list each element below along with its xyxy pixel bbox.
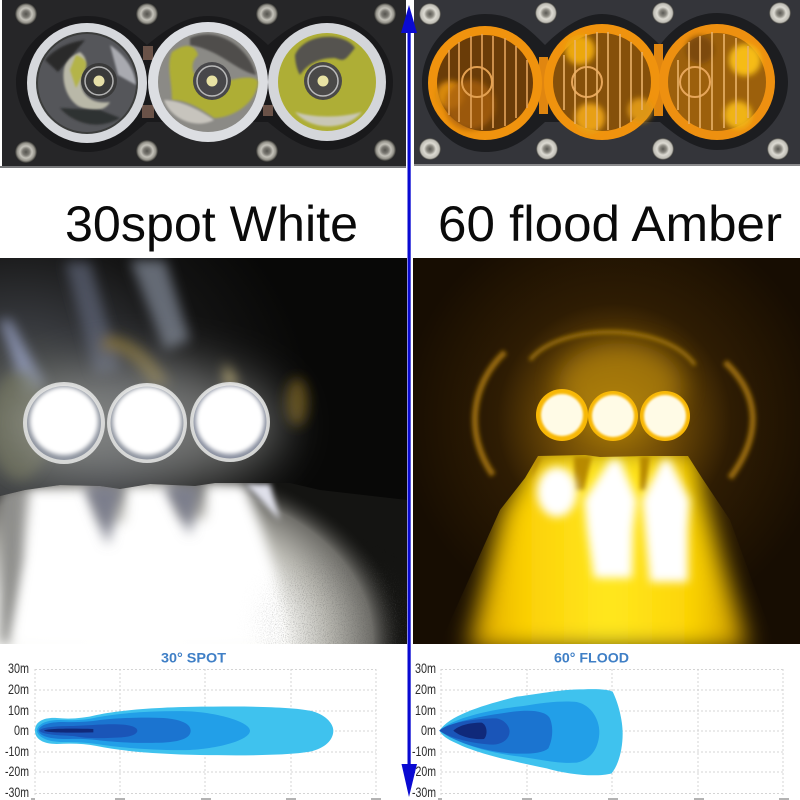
y axis labels: 0m: [421, 722, 436, 738]
amber lens bridges: [539, 44, 663, 116]
mounting bolts: [15, 3, 396, 163]
heading: 30spot White: 30spot White: [65, 196, 358, 252]
panel: white beam photo: [0, 258, 407, 650]
lens 1 reflector: [36, 32, 138, 134]
y axis labels: 30m: [8, 660, 29, 676]
amber housing recess: [422, 13, 788, 152]
amber beam on ground: [468, 450, 748, 650]
white beam on ground: [0, 480, 407, 650]
lens 2 reflector: [158, 32, 258, 132]
y axis labels: 20m: [8, 681, 29, 697]
y axis labels: 10m: [8, 702, 29, 718]
grid: [441, 669, 783, 795]
lens housing recess: [16, 16, 393, 152]
amber lens 3: [659, 24, 775, 140]
y axis labels: -10m: [5, 743, 29, 759]
y axis labels: 30m: [415, 660, 436, 676]
y axis labels: -20m: [5, 763, 29, 779]
panel: amber beam photo: [413, 258, 800, 650]
y axis labels: 20m: [415, 681, 436, 697]
amber lens 1: [428, 26, 542, 140]
amber lamp 3: [640, 391, 690, 441]
y axis labels: -30m: [5, 784, 29, 800]
panel: amber flood light bar: [414, 0, 800, 166]
white lamp 2: [107, 383, 187, 463]
grid: [35, 669, 376, 795]
y axis labels: -20m: [412, 763, 436, 779]
chrome lens rings: [27, 22, 386, 143]
beam pattern: [439, 689, 623, 775]
lens 3 reflector: [278, 33, 376, 131]
amber lamp 1: [536, 389, 588, 441]
white lamp 1: [23, 382, 105, 464]
y axis labels: -10m: [412, 743, 436, 759]
chart: 60 degree flood: [412, 650, 783, 800]
amber lamp 2: [588, 391, 638, 441]
halo rings: [475, 332, 753, 478]
heading: 60 flood Amber: 60 flood Amber: [438, 196, 782, 252]
y axis labels: 0m: [14, 722, 29, 738]
amber bar bolts: [419, 2, 791, 160]
y axis labels: -30m: [412, 784, 436, 800]
beam pattern: [35, 706, 333, 755]
neck between lenses: [142, 46, 273, 118]
amber lens 2: [544, 24, 660, 140]
panel: white spot light bar: [0, 0, 406, 168]
lamp glow: [12, 365, 282, 485]
chart: 30 degree spot: [5, 650, 376, 800]
flare streaks: [0, 260, 308, 480]
y axis labels: [412, 660, 436, 800]
chart title: 60° FLOOD: [554, 650, 629, 666]
y axis labels: 10m: [415, 702, 436, 718]
double-headed divider arrow: [401, 5, 417, 797]
amber glow: [558, 343, 682, 427]
chart title: 30° SPOT: [161, 650, 226, 666]
white lamp 3: [190, 382, 270, 462]
y axis labels: [5, 660, 29, 800]
